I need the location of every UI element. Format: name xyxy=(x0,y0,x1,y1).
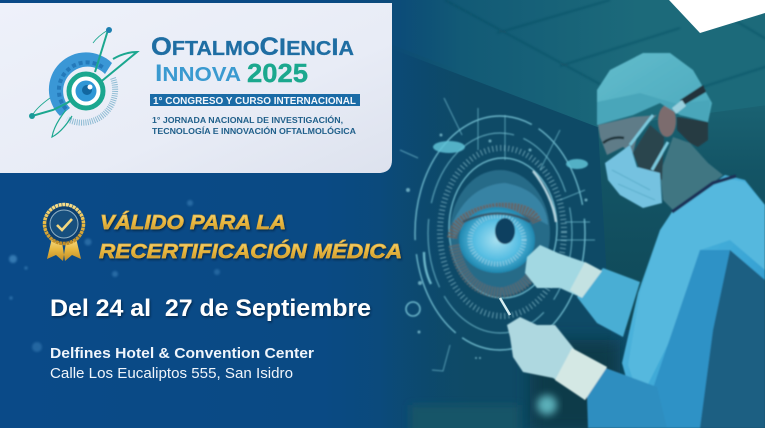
event title: INNOVA xyxy=(155,60,241,87)
ear xyxy=(658,105,676,137)
dotted arc xyxy=(67,78,115,123)
event title: OFTALMOCIENCIA xyxy=(151,33,354,61)
collar xyxy=(672,176,736,212)
gown sleeve shadow xyxy=(700,250,765,428)
outer rings xyxy=(415,116,585,350)
upper glove xyxy=(525,245,600,297)
event title xyxy=(151,33,354,88)
eye lids xyxy=(452,208,537,238)
logo emblem xyxy=(29,27,137,137)
hologram glows xyxy=(433,141,465,153)
network particles xyxy=(9,200,220,352)
subtitle: TECNOLOGÍA E INNOVACIÓN OFTALMOLÓGICA xyxy=(152,127,356,136)
surgical mask xyxy=(605,145,662,208)
beard xyxy=(633,125,664,180)
event title: 2025 xyxy=(247,58,308,88)
venue: Calle Los Eucaliptos 555, San Isidro xyxy=(50,366,293,382)
blue gear arc xyxy=(49,52,112,116)
gold headline: RECERTIFICACIÓN MÉDICA xyxy=(99,239,402,263)
cap strap xyxy=(680,85,706,105)
date: Del 24 al 27 de Septiembre xyxy=(50,295,371,322)
gown torso xyxy=(622,175,765,428)
eye ring xyxy=(69,74,103,108)
gold headline: VÁLIDO PARA LA xyxy=(100,211,286,234)
venue xyxy=(50,346,314,382)
orbits xyxy=(32,52,137,116)
ceiling light xyxy=(669,0,765,33)
hologram: digital eye xyxy=(400,98,595,371)
congress banner: 1° CONGRESO Y CURSO INTERNACIONAL xyxy=(153,96,356,107)
surgeon xyxy=(507,53,765,428)
white margins xyxy=(765,0,768,432)
neck xyxy=(660,137,723,210)
hair xyxy=(677,117,708,147)
iris xyxy=(459,207,535,273)
gold headline xyxy=(99,211,402,263)
icon: gold rosette xyxy=(44,204,84,261)
venue: Delfines Hotel & Convention Center xyxy=(50,346,314,362)
gown chest light xyxy=(628,178,765,400)
forearm sleeve xyxy=(587,367,667,428)
face xyxy=(598,115,657,155)
scalpel xyxy=(500,298,510,315)
eye surround xyxy=(450,170,550,296)
subtitle: 1° JORNADA NACIONAL DE INVESTIGACIÓN, xyxy=(152,116,343,125)
subtitle xyxy=(152,116,356,136)
upper arm sleeve xyxy=(577,268,640,337)
surgical cap xyxy=(597,53,712,125)
gown sleeve lit xyxy=(650,250,730,428)
lower glove xyxy=(507,317,607,400)
logo panel xyxy=(0,3,392,173)
